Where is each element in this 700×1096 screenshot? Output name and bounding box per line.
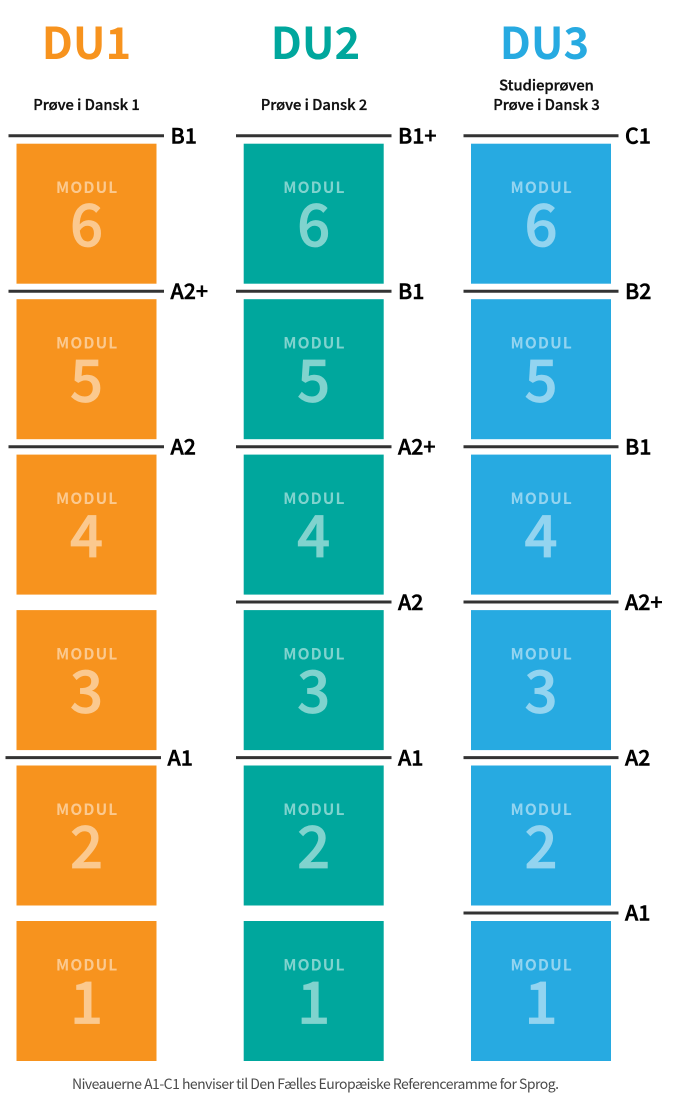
module 5: 5 <box>70 334 103 418</box>
module 4: 4 <box>70 490 103 574</box>
module 3: MODUL <box>56 642 118 664</box>
module 4: 4 <box>297 490 330 574</box>
module 2: 2 <box>297 801 330 885</box>
level marker: A2: A2 <box>170 430 196 462</box>
module 1 <box>244 921 384 1061</box>
module 6: MODUL <box>283 176 346 198</box>
level marker: B1: B1 <box>625 430 651 462</box>
module 4 <box>471 455 611 595</box>
level marker: B1+: B1+ <box>398 120 436 150</box>
title: DU3: DU3 <box>500 8 589 72</box>
footnote: Niveauerne A1-C1 henviser til Den Fælles Europæiske Referenceramme for Sprog. <box>72 1074 559 1094</box>
module 2 <box>471 766 611 906</box>
module 3 <box>244 610 384 750</box>
module 1: 1 <box>524 956 558 1040</box>
level marker: C1: C1 <box>625 120 651 150</box>
level marker: A2+: A2+ <box>398 430 436 462</box>
module 6 <box>471 144 611 284</box>
module 2: MODUL <box>56 798 118 820</box>
module 6 <box>16 144 156 284</box>
column: DU3 <box>464 8 663 1061</box>
module 5: MODUL <box>511 332 573 354</box>
level marker: A2+: A2+ <box>170 275 208 306</box>
level marker: B1: B1 <box>398 275 424 306</box>
module 3: MODUL <box>511 642 573 664</box>
module 5: 5 <box>524 334 558 418</box>
module 1: MODUL <box>283 954 346 976</box>
module 6: 6 <box>297 179 330 263</box>
module 5 <box>244 299 384 439</box>
module 6: MODUL <box>511 176 573 198</box>
module 5 <box>16 299 156 439</box>
module 1: MODUL <box>56 954 118 976</box>
module 2 <box>16 766 156 906</box>
module 3 <box>16 610 156 750</box>
title: DU2: DU2 <box>271 8 360 72</box>
module 4 <box>16 455 156 595</box>
subtitle: Studieprøven / Prøve i Dansk 3 <box>493 74 600 115</box>
title: DU1: DU1 <box>42 8 131 72</box>
module 2 <box>244 766 384 906</box>
module 2: 2 <box>524 801 558 885</box>
module 5: MODUL <box>56 332 118 354</box>
module 4: MODUL <box>283 487 346 509</box>
module 3: MODUL <box>283 642 346 664</box>
level marker: A1: A1 <box>625 896 650 928</box>
column: DU2 <box>236 8 436 1061</box>
subtitle: Studieprøven / Prøve i Dansk 3: Studieprøven <box>499 74 594 96</box>
level marker: A1: A1 <box>168 742 193 772</box>
module 4: 4 <box>524 490 558 574</box>
level marker: A1: A1 <box>398 742 423 772</box>
module 2: MODUL <box>511 798 573 820</box>
subtitle: Prøve i Dansk 2: Prøve i Dansk 2 <box>261 94 367 115</box>
module 1: 1 <box>297 956 330 1040</box>
level marker: A2: A2 <box>625 742 650 772</box>
module 2: MODUL <box>283 798 346 820</box>
subtitle: Studieprøven / Prøve i Dansk 3: Prøve i Dansk 3 <box>493 94 600 115</box>
module 4 <box>244 455 384 595</box>
module 6: MODUL <box>56 176 118 198</box>
module 2: 2 <box>70 801 103 885</box>
module 3 <box>471 610 611 750</box>
module 6 <box>244 144 384 284</box>
subtitle: Prøve i Dansk 1: Prøve i Dansk 1 <box>33 94 140 115</box>
module 5: MODUL <box>283 332 346 354</box>
module 5 <box>471 299 611 439</box>
module 3: 3 <box>297 646 330 730</box>
module 3: 3 <box>70 646 103 730</box>
module 6: 6 <box>70 179 103 263</box>
module 1: 1 <box>70 956 103 1040</box>
level marker: B1: B1 <box>170 120 197 150</box>
module 4: MODUL <box>56 487 118 509</box>
module 1 <box>16 921 156 1061</box>
level marker: A2+: A2+ <box>625 586 663 617</box>
level marker: B2: B2 <box>625 275 651 306</box>
module 3: 3 <box>524 646 558 730</box>
module 4: MODUL <box>511 487 573 509</box>
column: DU1 <box>6 8 208 1061</box>
level marker: A2: A2 <box>398 586 423 617</box>
module 1 <box>471 921 611 1061</box>
module 6: 6 <box>524 179 558 263</box>
module 5: 5 <box>297 334 330 418</box>
module 1: MODUL <box>511 954 573 976</box>
